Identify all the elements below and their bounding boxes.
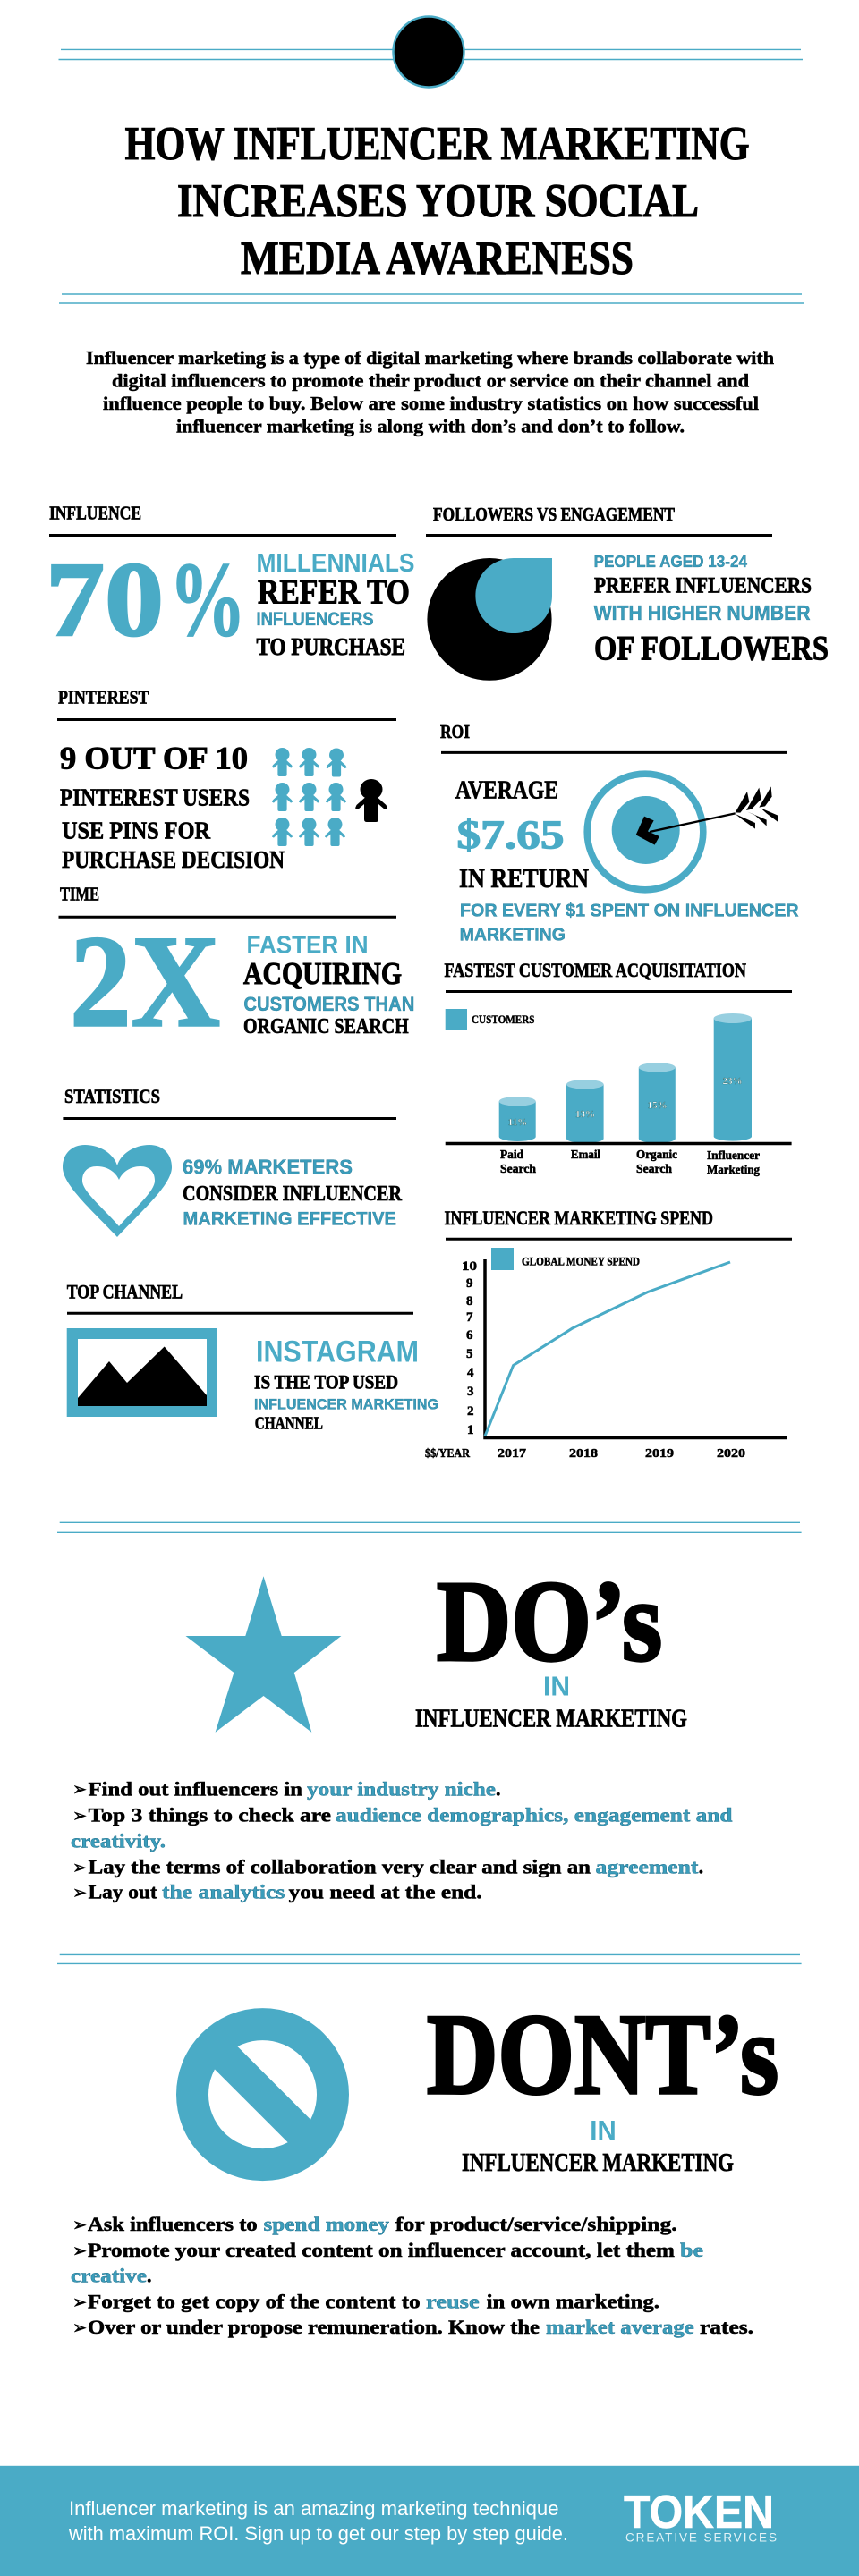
legend: CUSTOMERS	[472, 1013, 535, 1026]
bar: organic search: 15%	[648, 1100, 668, 1111]
roi caption	[455, 777, 799, 945]
do's list	[71, 1777, 732, 1903]
stat caption: TO PURCHASE	[256, 633, 405, 660]
heading: roi: ROI	[440, 721, 470, 742]
title: INCREASES YOUR SOCIAL	[177, 175, 699, 227]
bar labels: Influencer	[707, 1149, 760, 1163]
top channel caption: CHANNEL	[255, 1414, 323, 1434]
heading: fastest customer acquisitation: FASTEST CUSTOMER ACQUISITATION	[444, 959, 746, 981]
statistics caption: 69% MARKETERS	[183, 1156, 353, 1179]
dont's list: ➢	[72, 2240, 87, 2261]
heading: time: TIME	[60, 884, 99, 905]
followers caption	[594, 553, 829, 667]
roi caption: MARKETING	[460, 925, 566, 945]
dont's list: Ask influencers to	[88, 2213, 258, 2235]
icon: people pictogram	[272, 748, 387, 846]
pinterest caption: USE PINS FOR	[62, 817, 210, 843]
icon: prohibition sign	[192, 2024, 333, 2165]
title: MEDIA AWARENESS	[241, 233, 634, 284]
bar: organic search	[639, 1063, 676, 1143]
time caption: ACQUIRING	[243, 956, 402, 991]
heading: do's	[415, 1557, 687, 1733]
stat: 70%	[46, 540, 246, 658]
y axis labels	[462, 1259, 477, 1437]
stat caption: REFER TO	[258, 572, 410, 611]
dont's list: ➢	[72, 2292, 87, 2313]
chart: pie	[427, 555, 558, 681]
do's list: ➢	[72, 1882, 87, 1903]
header ornament	[59, 16, 803, 88]
intro text: digital influencers to promote their product or service on their channel and	[112, 370, 749, 392]
bar labels: Search	[500, 1163, 536, 1176]
time caption	[243, 930, 414, 1038]
y axis labels: 4	[467, 1366, 474, 1380]
bar: paid search	[499, 1097, 536, 1141]
stat caption: MILLENNIALS	[256, 549, 415, 578]
bar: influencer marketing: 23%	[723, 1076, 743, 1087]
panel: statistics	[63, 1085, 403, 1237]
x axis labels: 2017	[498, 1447, 526, 1461]
y axis labels: 10	[462, 1259, 477, 1274]
do's list: Lay the terms of collaboration very clear and sign an	[89, 1856, 591, 1878]
do's list: audience demographics, engagement and	[336, 1804, 732, 1826]
panel: do's	[71, 1557, 732, 1903]
heading: pinterest: PINTEREST	[58, 687, 149, 708]
dont's list: ➢	[72, 2214, 87, 2235]
icon: image frame	[67, 1328, 217, 1417]
do's list: your industry niche	[307, 1777, 496, 1800]
do's list: Lay out	[89, 1881, 157, 1903]
title	[125, 118, 750, 284]
dont's list: .	[147, 2265, 152, 2287]
time caption: FASTER IN	[247, 930, 369, 959]
y axis labels: 5	[466, 1347, 472, 1361]
bar: paid search: 11%	[508, 1117, 527, 1128]
footer text	[68, 2497, 568, 2545]
y axis labels: 1	[467, 1423, 474, 1437]
intro text: influencer marketing is along with don’s and don’t to follow.	[176, 415, 685, 436]
y axis labels: 2	[467, 1404, 474, 1419]
bar labels	[500, 1148, 760, 1177]
do's list: ➢	[72, 1778, 87, 1800]
dont's list: for product/service/shipping.	[395, 2213, 677, 2235]
statistics caption: MARKETING EFFECTIVE	[183, 1209, 396, 1229]
x axis labels: 2019	[645, 1447, 674, 1461]
legend: GLOBAL MONEY SPEND	[522, 1255, 640, 1268]
heading: dont's: INFLUENCER MARKETING	[462, 2149, 734, 2177]
x axis labels	[425, 1447, 745, 1461]
stat: 70%: 70	[46, 540, 164, 658]
stat caption	[256, 549, 415, 660]
statistics caption	[183, 1156, 403, 1229]
followers caption: WITH HIGHER NUMBER	[594, 601, 811, 624]
footer band	[0, 2466, 859, 2576]
pinterest caption: 9 OUT OF 10	[60, 741, 248, 776]
icon: star	[186, 1576, 341, 1733]
panel: influence	[46, 503, 415, 660]
heading: do's: DO’s	[437, 1557, 662, 1685]
intro text	[86, 347, 774, 436]
intro text: Influencer marketing is a type of digital marketing where brands collaborate with	[86, 347, 774, 369]
do's list: Top 3 things to check are	[89, 1804, 331, 1826]
top channel caption: INSTAGRAM	[256, 1335, 419, 1368]
bar: email: 13%	[575, 1109, 595, 1120]
pinterest caption	[60, 741, 285, 873]
dont's list: reuse	[426, 2291, 480, 2313]
roi caption: IN RETURN	[459, 862, 589, 894]
y axis labels: 9	[466, 1276, 472, 1291]
x axis labels: $$/YEAR	[425, 1447, 471, 1461]
do's list: the analytics	[162, 1881, 285, 1903]
heading: dont's: DONT’s	[427, 1990, 778, 2118]
panel: time	[59, 884, 414, 1054]
dont's list: ➢	[72, 2317, 87, 2338]
dont's list: be	[680, 2239, 703, 2261]
bar: influencer marketing	[714, 1013, 752, 1141]
dont's list: Promote your created content on influencer account, let them	[88, 2239, 675, 2261]
line chart	[425, 1259, 787, 1461]
statistics caption: CONSIDER INFLUENCER	[183, 1182, 403, 1206]
top channel caption	[254, 1335, 438, 1434]
do's list: ➢	[72, 1805, 87, 1826]
bar labels: Organic	[636, 1148, 677, 1162]
dont's list: in own marketing.	[487, 2291, 659, 2313]
panel: followers vs engagement	[426, 504, 829, 681]
logo: token creative services: TOKEN	[624, 2487, 774, 2538]
y axis labels: 3	[467, 1385, 474, 1399]
panel: fastest customer acquisition chart	[444, 959, 792, 1177]
followers caption: PEOPLE AGED 13-24	[594, 553, 747, 571]
time caption: ORGANIC SEARCH	[243, 1015, 409, 1038]
icon: heart	[63, 1145, 172, 1237]
top channel caption: IS THE TOP USED	[254, 1370, 398, 1394]
bar labels: Marketing	[707, 1164, 760, 1177]
dont's list	[71, 2213, 753, 2338]
heading: dont's: IN	[590, 2114, 617, 2146]
time caption: CUSTOMERS THAN	[243, 993, 414, 1015]
legend	[446, 1009, 535, 1030]
panel: top channel	[67, 1281, 438, 1434]
bar labels: Paid	[500, 1148, 523, 1162]
do's list: .	[496, 1777, 501, 1800]
footer text: with maximum ROI. Sign up to get our step by step guide.	[68, 2522, 568, 2545]
do's list: agreement	[596, 1856, 699, 1878]
y axis labels: 7	[466, 1310, 473, 1325]
stat: 70%: %	[169, 540, 246, 658]
top channel caption: INFLUENCER MARKETING	[254, 1395, 438, 1413]
roi caption: FOR EVERY $1 SPENT ON INFLUENCER	[460, 902, 799, 921]
do's list: Find out influencers in	[89, 1777, 302, 1800]
intro text: influence people to buy. Below are some industry statistics on how successful	[103, 393, 759, 414]
pinterest caption: PURCHASE DECISION	[62, 846, 285, 873]
logo: token creative services: CREATIVE SERVICES	[625, 2531, 777, 2545]
heading: top channel: TOP CHANNEL	[67, 1281, 183, 1303]
heading: statistics: STATISTICS	[64, 1085, 160, 1107]
do's list: ➢	[72, 1857, 87, 1878]
legend	[491, 1248, 640, 1270]
do's list: creativity.	[71, 1830, 166, 1852]
panel: pinterest	[57, 687, 396, 873]
x axis labels: 2020	[717, 1447, 745, 1461]
panel: influencer marketing spend	[425, 1207, 792, 1461]
roi caption: AVERAGE	[455, 777, 558, 805]
heading: followers vs engagement: FOLLOWERS VS ENGAGEMENT	[433, 504, 675, 525]
stat: 2X: 2X	[70, 909, 220, 1054]
icon: target with arrow	[587, 774, 778, 890]
heading: dont's	[427, 1990, 778, 2177]
heading: do's: IN	[543, 1671, 570, 1702]
dont's list: creative	[71, 2265, 147, 2287]
heading: influence: INFLUENCE	[49, 503, 141, 524]
dont's list: spend money	[263, 2213, 389, 2235]
heading: do's: INFLUENCER MARKETING	[415, 1706, 687, 1733]
dont's list: Forget to get copy of the content to	[88, 2291, 421, 2313]
footer text: Influencer marketing is an amazing marketing technique	[69, 2497, 558, 2520]
followers caption: PREFER INFLUENCERS	[594, 574, 812, 598]
y axis labels: 8	[466, 1294, 472, 1309]
bar: email	[566, 1080, 604, 1143]
bar labels: Search	[636, 1163, 672, 1176]
panel: dont's	[71, 1990, 778, 2338]
dont's list: market average	[546, 2316, 694, 2338]
dont's list: rates.	[700, 2316, 753, 2338]
bar labels: Email	[571, 1148, 600, 1162]
do's list: .	[699, 1856, 703, 1878]
dont's list: Over or under propose remuneration. Know the	[88, 2316, 540, 2338]
panel: roi	[440, 721, 799, 945]
y axis labels: 6	[466, 1328, 473, 1343]
x axis labels: 2018	[569, 1447, 598, 1461]
bar chart	[446, 1013, 792, 1143]
pinterest caption: PINTEREST USERS	[60, 784, 250, 811]
do's list: you need at the end.	[289, 1881, 482, 1903]
stat caption: INFLUENCERS	[256, 609, 374, 630]
roi caption: $7.65	[456, 812, 564, 857]
heading: influencer marketing spend: INFLUENCER MARKETING SPEND	[444, 1207, 713, 1229]
